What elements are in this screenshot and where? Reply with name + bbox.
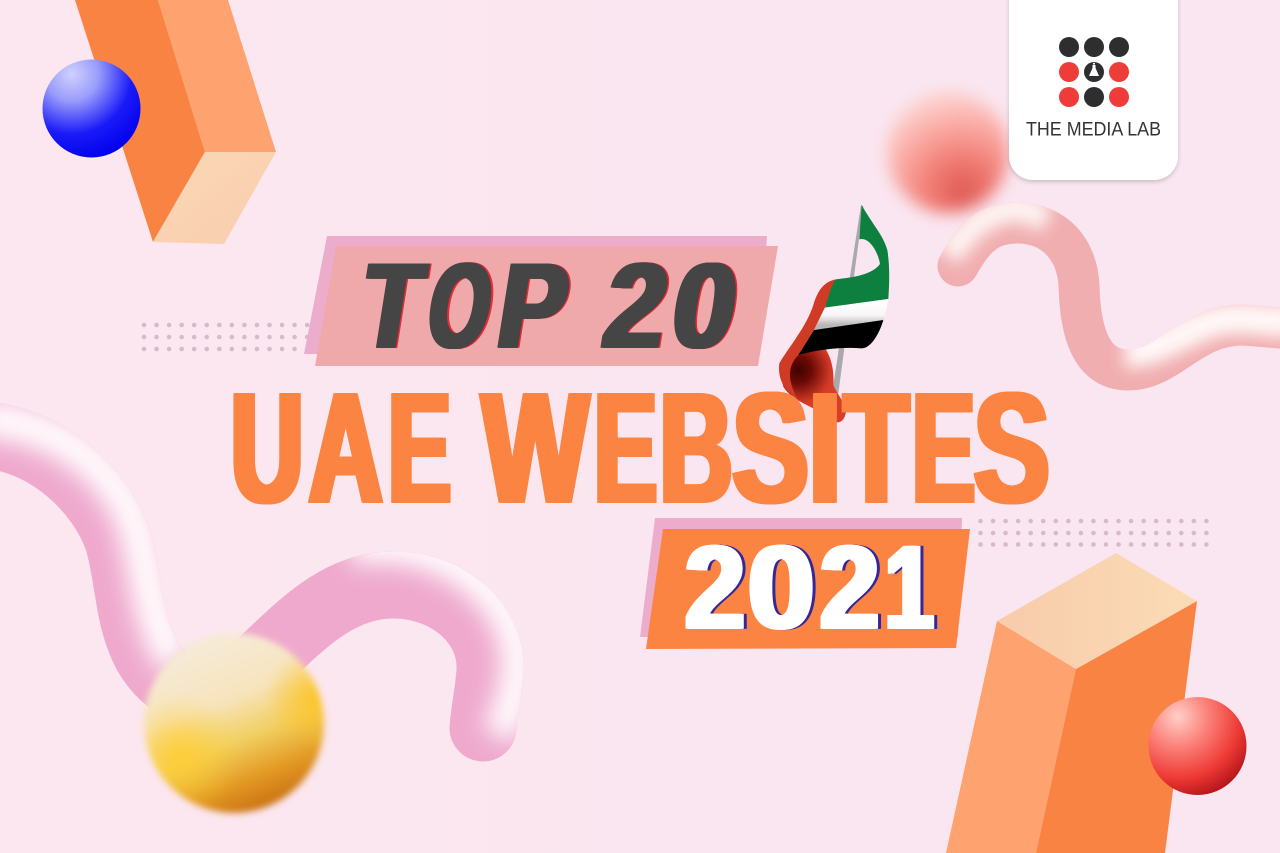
red sphere [1148, 697, 1246, 795]
heading: top 20: 0 [664, 238, 746, 373]
banner: top 20 [304, 236, 778, 366]
heading: top 20: T [353, 239, 432, 373]
logo card [1009, 0, 1178, 180]
heading: UAE websites: E [912, 361, 975, 536]
heading: 2021: 0 [751, 523, 817, 654]
logo wordmark: THE MEDIA LAB [1026, 118, 1161, 140]
heading: top 20: P [491, 240, 579, 373]
heading: 2021: 2 [823, 521, 882, 653]
heading: UAE websites: S [974, 360, 1049, 535]
heading: UAE websites: W [482, 360, 589, 535]
heading: UAE websites: B [660, 360, 732, 535]
heading: top 20 [353, 238, 748, 373]
heading: UAE websites: A [309, 361, 382, 536]
blurred red sphere [887, 91, 1009, 213]
heading: 2021 [685, 521, 936, 654]
yellow sphere [144, 633, 324, 813]
heading: UAE websites: I [809, 360, 841, 536]
heading: top 20: P [490, 240, 577, 373]
heading: top 20: 0 [665, 238, 748, 373]
heading: UAE websites: U [231, 360, 303, 535]
flag rear fold [779, 348, 846, 422]
heading: UAE websites: T [844, 361, 909, 536]
heading: top 20: O [422, 238, 503, 373]
flag pole [832, 205, 863, 393]
flag green band [825, 205, 889, 308]
heading: UAE websites: S [732, 361, 809, 536]
heading: UAE websites: E [594, 361, 657, 536]
flag black band [798, 320, 883, 355]
orange prism: top left [75, 0, 276, 244]
heading: top 20: 2 [596, 239, 677, 373]
heading: 2021: 1 [888, 521, 936, 653]
heading: top 20: 2 [597, 239, 678, 373]
heading: top 20: T [354, 239, 434, 373]
heading: top 20: O [420, 238, 501, 373]
flag red band [779, 279, 836, 397]
blue sphere [42, 60, 140, 158]
logo dot grid [1059, 37, 1129, 107]
dot pattern: right [980, 521, 1208, 544]
flag white band [814, 299, 888, 330]
dot pattern: left [144, 325, 318, 349]
heading: UAE websites: E [388, 361, 451, 536]
pink-coral tube: right [948, 208, 1280, 370]
banner: 2021 [640, 518, 970, 649]
icon: UAE flag [779, 205, 889, 422]
pink tube: left [0, 418, 519, 735]
heading: 2021: 2 [688, 521, 748, 653]
heading: 2021: 1 [885, 521, 933, 653]
heading: 2021: 0 [748, 523, 814, 654]
heading: 2021: 2 [685, 521, 745, 653]
heading: 2021: 2 [820, 521, 879, 653]
heading: UAE websites [231, 360, 1049, 536]
orange prism: bottom right [946, 553, 1197, 853]
